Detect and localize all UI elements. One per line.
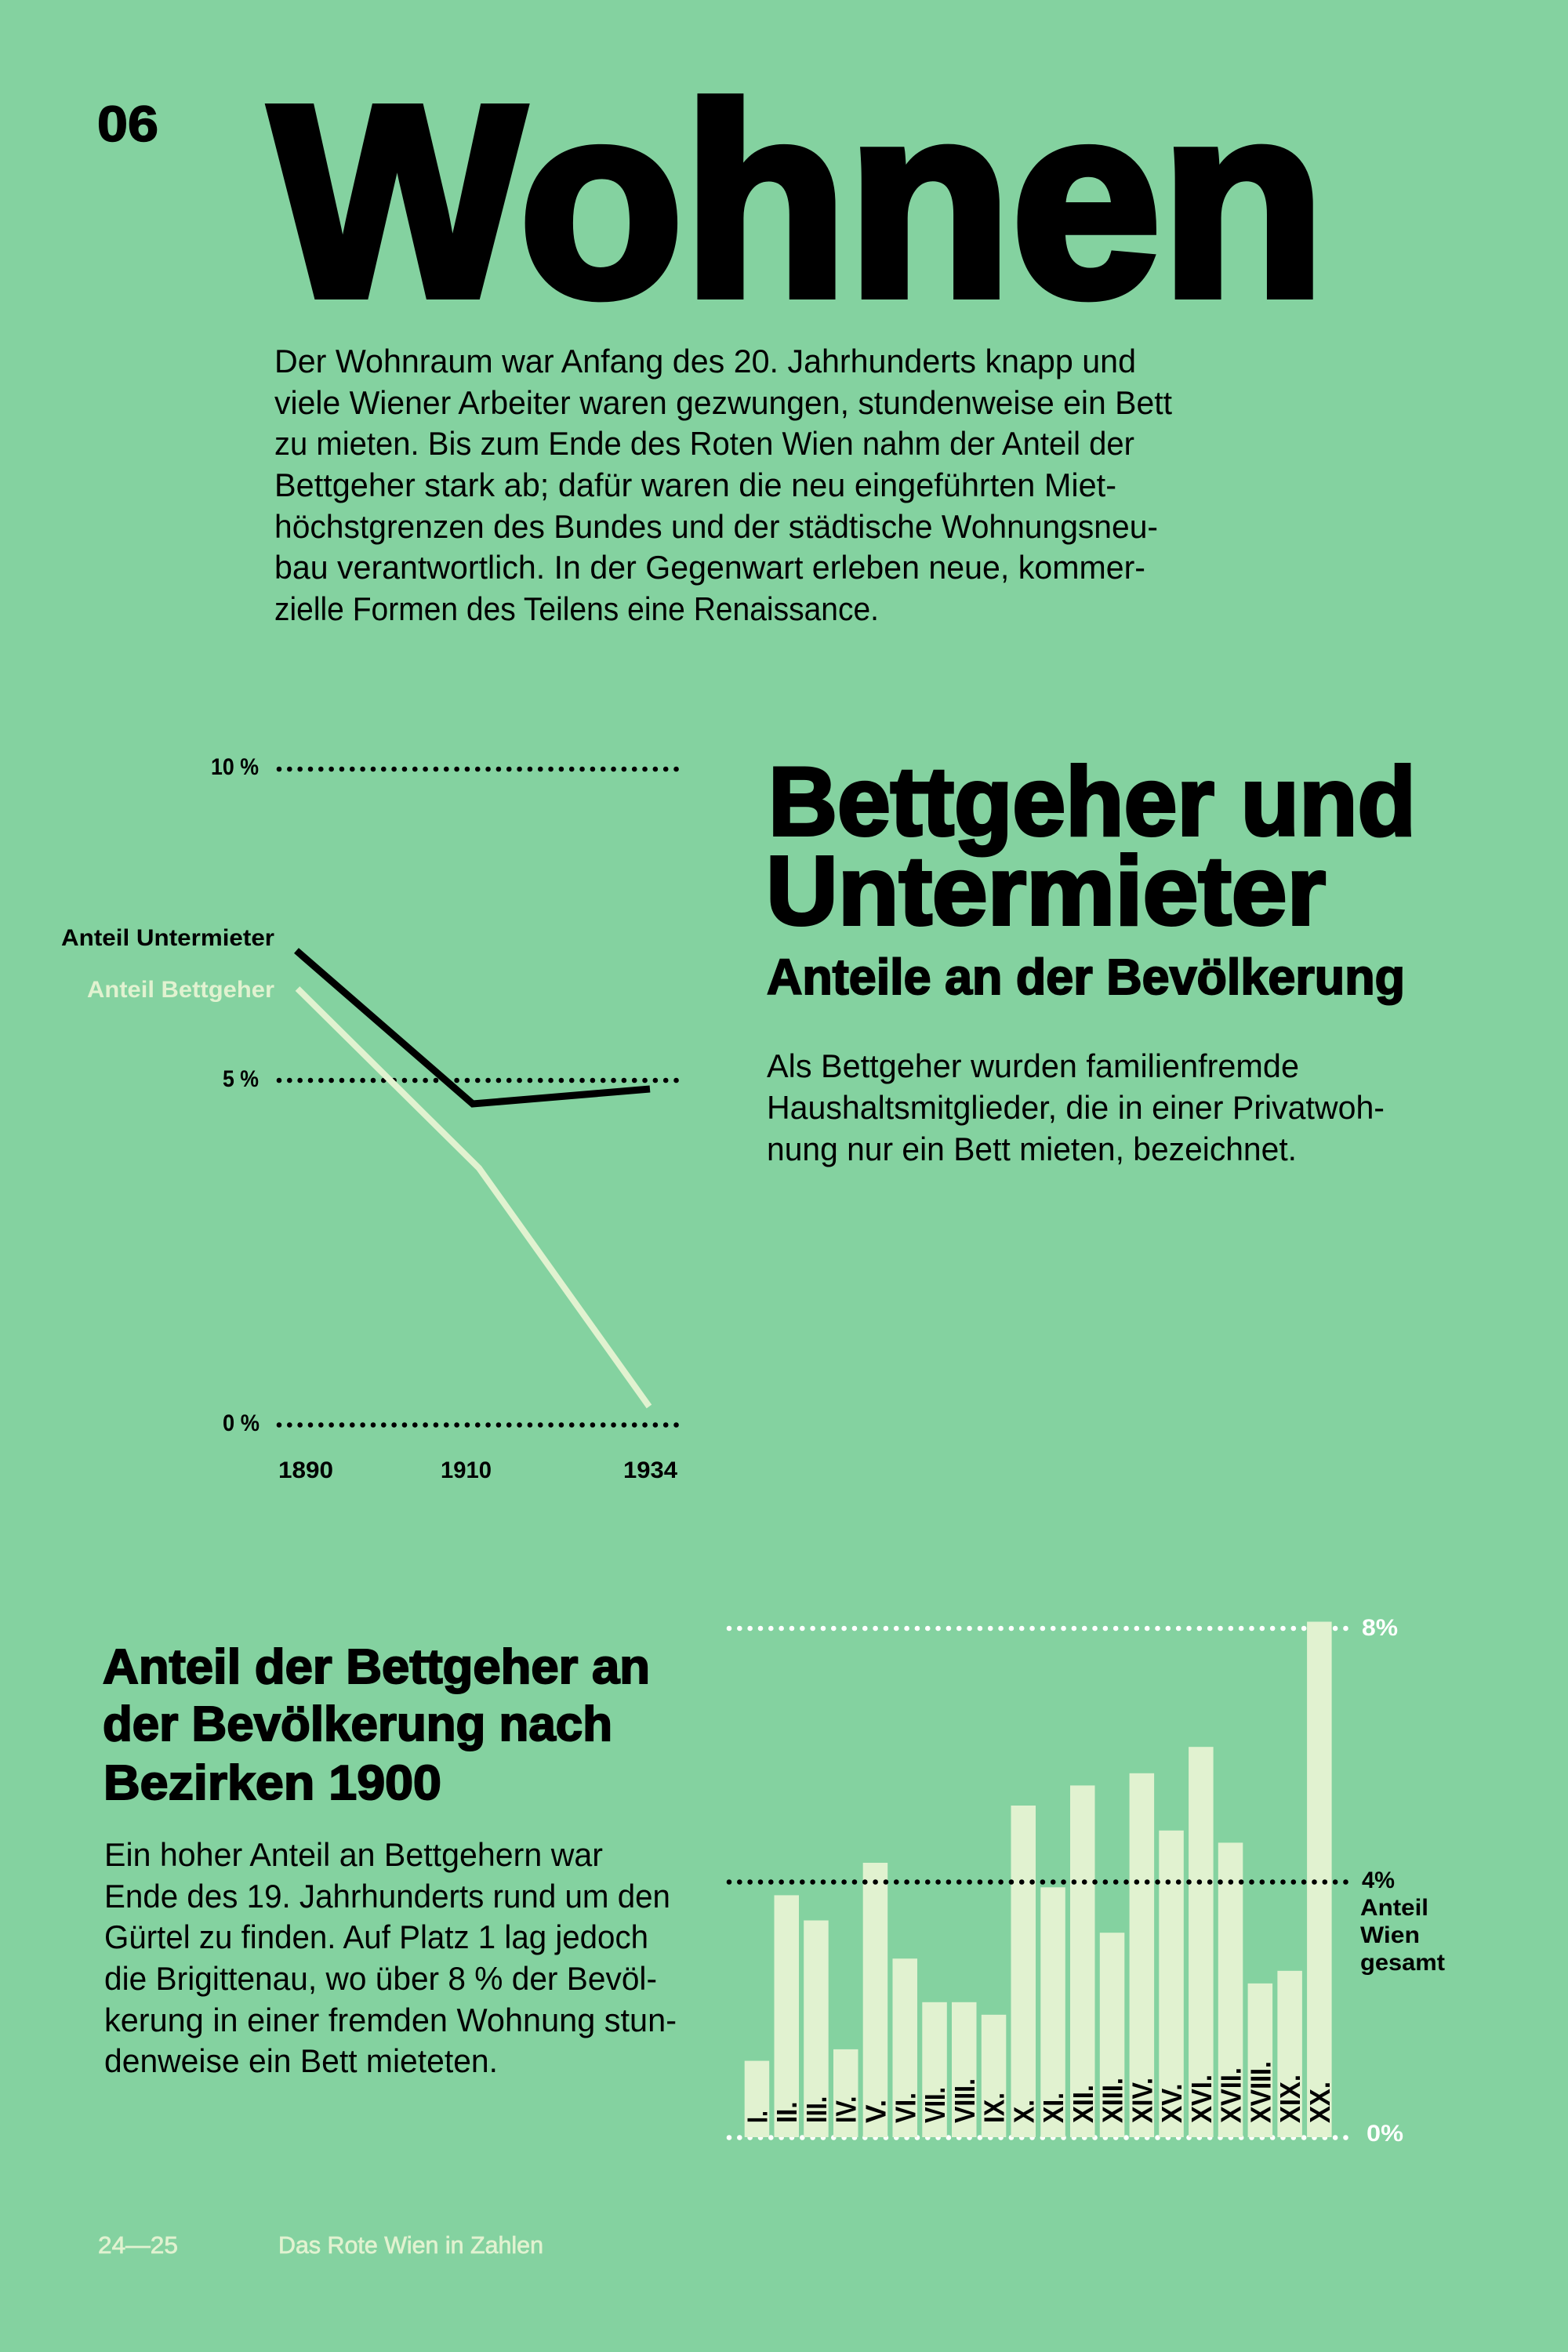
district labels: IX.: [978, 2092, 1010, 2123]
definition text block: nung nur ein Bett mieten, bezeichnet.: [767, 1131, 1297, 1167]
line chart: Bettgeher und Untermieter: [61, 754, 679, 1483]
district labels: I.: [742, 2111, 773, 2123]
intro text block: bau verantwortlich. In der Gegenwart erleben neue, kommer-: [274, 549, 1145, 586]
district labels: XV.: [1156, 2084, 1188, 2123]
district labels: XIX.: [1274, 2074, 1306, 2123]
district text block: [104, 1836, 677, 2079]
intro text block: [274, 343, 1172, 627]
heading: Anteil nach Bezirken: Bezirken 1900: [103, 1756, 441, 1810]
axis label: 0%: 0%: [1367, 2121, 1403, 2147]
definition text block: Haushaltsmitglieder, die in einer Privatwoh-: [767, 1089, 1385, 1126]
district labels: IV.: [830, 2096, 862, 2123]
axis labels: 10 %: [211, 754, 259, 780]
district labels: XVIII.: [1244, 2061, 1276, 2123]
heading: Bettgeher und Untermieter: Bettgeher und: [768, 748, 1416, 856]
axis labels: 1890: [278, 1457, 333, 1483]
district labels: V.: [859, 2100, 892, 2123]
district labels: II.: [771, 2101, 803, 2123]
intro text block: zu mieten. Bis zum Ende des Roten Wien nahm der Anteil der: [274, 425, 1134, 462]
district text block: denweise ein Bett mieteten.: [104, 2042, 498, 2079]
subheading: Anteile an der Bevölkerung: [767, 949, 1405, 1005]
axis label: 8%: 8%: [1362, 1615, 1398, 1641]
intro text block: höchstgrenzen des Bundes und der städtische Wohnungsneu-: [274, 508, 1158, 545]
district labels: XII.: [1067, 2085, 1099, 2123]
district labels: VI.: [889, 2092, 921, 2123]
district labels: [742, 2061, 1336, 2123]
heading: Bettgeher und Untermieter: [766, 748, 1416, 946]
bar chart: Bettgeher by district: [729, 1615, 1445, 2147]
heading: Bettgeher und Untermieter: Untermieter: [766, 837, 1326, 946]
district labels: XVI.: [1185, 2074, 1218, 2123]
title: Wohnen: [270, 50, 1325, 353]
heading: Anteil nach Bezirken: der Bevölkerung nach: [103, 1697, 612, 1751]
heading: Anteil nach Bezirken: [103, 1640, 650, 1810]
district labels: XVII.: [1215, 2067, 1247, 2123]
district text block: Ein hoher Anteil an Bettgehern war: [104, 1836, 603, 1873]
axis labels: 1910: [441, 1457, 492, 1483]
axis labels: 1934: [623, 1457, 677, 1483]
intro text block: viele Wiener Arbeiter waren gezwungen, stundenweise ein Bett: [274, 384, 1172, 421]
district labels: XIV.: [1126, 2078, 1158, 2123]
footer: publication title: Das Rote Wien in Zahlen: [278, 2231, 543, 2259]
district labels: XIII.: [1097, 2078, 1129, 2123]
axis label: 4% Anteil Wien gesamt: gesamt: [1360, 1950, 1445, 1976]
bars: [745, 1621, 1332, 2137]
axis labels: 0 %: [223, 1410, 260, 1436]
series line: Bettgeher: [298, 989, 649, 1406]
series line: Untermieter: [296, 950, 650, 1104]
district labels: XI.: [1037, 2092, 1069, 2123]
intro text block: zielle Formen des Teilens eine Renaissance.: [274, 590, 879, 627]
definition text block: [767, 1047, 1385, 1167]
axis label: 4% Anteil Wien gesamt: 4%: [1362, 1867, 1395, 1893]
district text block: Gürtel zu finden. Auf Platz 1 lag jedoch: [104, 1918, 648, 1955]
district labels: III.: [800, 2096, 833, 2123]
footer: page numbers: 24—25: [98, 2231, 178, 2259]
section number: 06: [97, 96, 158, 152]
axis label: 4% Anteil Wien gesamt: Wien: [1360, 1922, 1420, 1948]
definition text block: Als Bettgeher wurden familienfremde: [767, 1047, 1299, 1084]
axis label: 4% Anteil Wien gesamt: [1360, 1867, 1445, 1976]
district labels: VIII.: [949, 2078, 981, 2123]
intro text block: Bettgeher stark ab; dafür waren die neu eingeführten Miet-: [274, 466, 1116, 503]
axis labels: [211, 754, 677, 1483]
district text block: kerung in einer fremden Wohnung stun-: [104, 2002, 677, 2038]
axis label: 4% Anteil Wien gesamt: Anteil: [1360, 1895, 1428, 1921]
series label: Bettgeher: Anteil Bettgeher: [87, 977, 274, 1003]
district text block: Ende des 19. Jahrhunderts rund um den: [104, 1878, 670, 1915]
series label: Untermieter: Anteil Untermieter: [61, 925, 274, 951]
district labels: VII.: [919, 2087, 951, 2123]
district labels: XX.: [1304, 2082, 1336, 2123]
district text block: die Brigittenau, wo über 8 % der Bevöl-: [104, 1960, 657, 1997]
heading: Anteil nach Bezirken: Anteil der Bettgeher an: [103, 1640, 650, 1694]
axis labels: 5 %: [223, 1066, 259, 1092]
district labels: X.: [1007, 2100, 1040, 2123]
intro text block: Der Wohnraum war Anfang des 20. Jahrhunderts knapp und: [274, 343, 1136, 379]
